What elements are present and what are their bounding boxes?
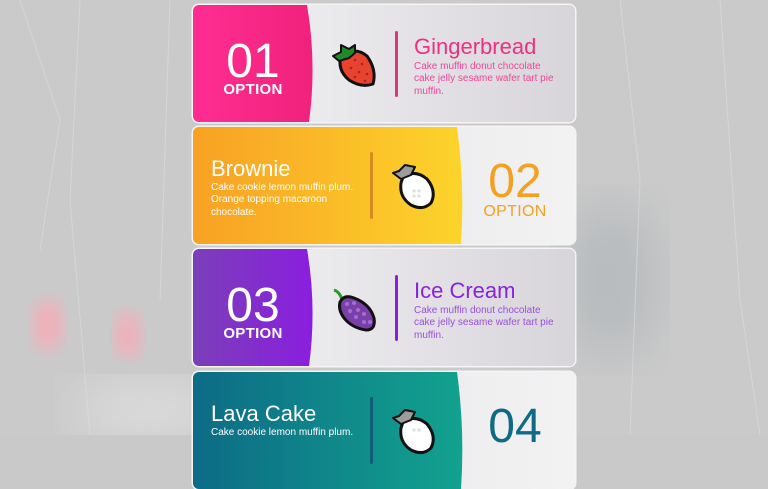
divider	[395, 31, 398, 97]
label OPTION: OPTION	[223, 325, 283, 342]
icon: lemon	[392, 164, 435, 210]
number 02: 02	[488, 155, 542, 208]
card 1: Gingerbread	[193, 5, 575, 122]
card 3: Ice Cream	[193, 249, 575, 366]
card 2: Brownie	[193, 127, 575, 244]
number 04: 04	[488, 400, 542, 453]
number 01: 01	[226, 35, 280, 88]
title: Gingerbread	[414, 34, 536, 59]
divider	[395, 275, 398, 341]
divider	[370, 397, 373, 464]
description: Cake muffin donut chocolate cake jelly sesame wafer tart pie muffin.	[414, 61, 554, 97]
card 4: Lava Cake	[193, 372, 575, 489]
label OPTION: OPTION	[223, 81, 283, 98]
title: Lava Cake	[211, 401, 316, 426]
title: Ice Cream	[414, 278, 515, 303]
description: Cake cookie lemon muffin plum. Orange topping macaroon chocolate.	[211, 182, 353, 218]
description: Cake muffin donut chocolate cake jelly sesame wafer tart pie muffin.	[414, 305, 554, 341]
icon: strawberry	[332, 44, 376, 87]
divider	[370, 152, 373, 219]
label OPTION: OPTION	[483, 203, 547, 220]
number 03: 03	[226, 279, 280, 332]
description: Cake cookie lemon muffin plum.	[211, 427, 353, 438]
icon: lemon	[392, 409, 435, 454]
icon: grapes	[334, 288, 376, 332]
title: Brownie	[211, 156, 290, 181]
